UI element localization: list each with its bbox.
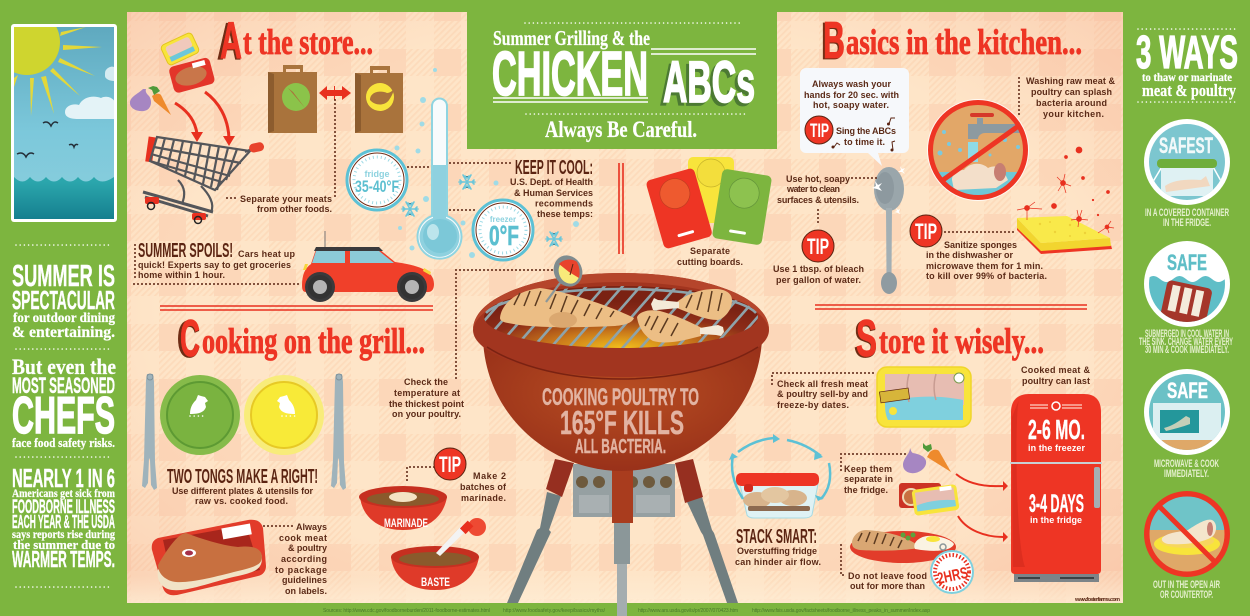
text: cooking poultry to 165: 165°F KILLS bbox=[560, 404, 684, 441]
section: store it wisely bbox=[729, 310, 1120, 603]
title block bbox=[467, 12, 777, 149]
text: always cook meat: to package bbox=[275, 565, 327, 575]
tip: bleach bbox=[773, 210, 864, 285]
sources: Sources: http://www.cdc.gov/foodborneburden/2011-foodborne-estimates.html bbox=[323, 608, 490, 614]
chicken breast bbox=[500, 288, 634, 328]
text: stack smart: Overstuffing fridge bbox=[737, 546, 817, 556]
caption: safe microwave bbox=[1154, 458, 1219, 480]
heading: cooking on the grill bbox=[177, 310, 425, 369]
text: keep it cool bbox=[450, 157, 593, 219]
text: keep it cool: these temps: bbox=[537, 209, 593, 219]
caption: not on countertop bbox=[1153, 579, 1220, 601]
divider: left horizontal bbox=[160, 306, 433, 310]
text: keep it cool: recommends bbox=[535, 198, 593, 208]
chefs text: CHEFS bbox=[12, 387, 115, 445]
heading: at the store bbox=[217, 12, 373, 71]
icon: 2 hour timer: 2HRS bbox=[936, 565, 970, 588]
icon: spoon bbox=[872, 166, 905, 294]
dotted connector bbox=[334, 100, 336, 200]
caption: safe microwave: IMMEDIATELY. bbox=[1164, 468, 1209, 480]
tip: bleach: TIP bbox=[807, 234, 829, 259]
text: summer spoils: SUMMER SPOILS! bbox=[138, 240, 233, 262]
text: two tongs make a right: raw vs. cooked food. bbox=[195, 496, 288, 506]
circle: not on countertop bbox=[1144, 491, 1230, 577]
icon: cutting boards bbox=[645, 157, 772, 249]
statistic text: WARMER TEMPS. bbox=[12, 546, 115, 572]
heading: 3 ways bbox=[1136, 26, 1238, 102]
text: always cook meat: Always bbox=[296, 522, 327, 532]
heading: basics in the kitchen: asics in the kitchen... bbox=[846, 22, 1082, 62]
text: summer spoils: Cars heat up bbox=[238, 249, 296, 259]
text: stack smart: can hinder air flow. bbox=[735, 557, 821, 567]
heading: 3 ways: to thaw or marinate bbox=[1142, 70, 1233, 84]
heading: cooking on the grill: ooking on the grill... bbox=[202, 321, 425, 361]
circle: safe microwave: SAFE bbox=[1167, 378, 1208, 403]
heading: store it wisely: S bbox=[854, 311, 877, 369]
caption: safest bbox=[1145, 207, 1229, 229]
chefs text: MOST SEASONED bbox=[12, 373, 115, 398]
text: stack smart bbox=[735, 526, 821, 567]
sources: http://www.fsis.usda.gov/factsheets/foodborne_illness_peaks_in_summer/index.asp bbox=[752, 608, 930, 614]
gauge: freezer temperature bbox=[450, 200, 533, 260]
heading: store it wisely: tore it wisely... bbox=[879, 321, 1044, 361]
text: separate your meats bbox=[227, 194, 332, 214]
grill legs bbox=[507, 459, 738, 616]
icon: meat trays bbox=[160, 32, 216, 94]
tip: sanitize sponges bbox=[910, 215, 1047, 281]
icon: chicken tray bbox=[877, 367, 971, 427]
speech bubble: hands for 20 sec. with bbox=[804, 90, 899, 100]
chefs text: But even the bbox=[12, 354, 116, 379]
icon: baste bowl and baster: BASTE bbox=[421, 575, 450, 589]
summer is spectacular text: SPECTACULAR bbox=[12, 285, 115, 315]
circle: safe water: SAFE bbox=[1167, 250, 1207, 275]
heading: basics in the kitchen: B bbox=[823, 12, 845, 70]
grill interior with grate bbox=[484, 286, 758, 348]
icon: red fridge bbox=[1010, 394, 1102, 582]
left sidebar: FOODBORNE ILLNESS bbox=[12, 497, 115, 518]
statistic text: says reports rise during bbox=[12, 529, 115, 541]
title block: Summer Grilling & the bbox=[493, 26, 650, 50]
heading: store it wisely bbox=[854, 310, 1044, 369]
icon: red fridge: 3-4 DAYS bbox=[1029, 490, 1084, 518]
tip: sanitize sponges: TIP bbox=[915, 219, 937, 244]
arrows into fridge bbox=[956, 474, 1008, 542]
sources bbox=[323, 608, 930, 614]
text: check fresh meat: & poultry sell-by and bbox=[777, 389, 868, 399]
text: always cook meat: on labels. bbox=[285, 586, 327, 596]
tip: sanitize sponges: to kill over 99% of bacteria. bbox=[926, 271, 1047, 281]
grill bbox=[473, 255, 769, 616]
text: summer spoils: home within 1 hour. bbox=[138, 270, 225, 280]
title block: Always Be Careful. bbox=[545, 117, 697, 142]
badge: tip: TIP bbox=[810, 121, 829, 142]
heading: at the store: A bbox=[220, 12, 242, 70]
tip: marinade: Make 2 bbox=[473, 471, 506, 481]
circle: safest fridge: SAFEST bbox=[1159, 133, 1213, 158]
gauge: fridge temperature: fridge bbox=[364, 169, 390, 179]
circle: safe microwave bbox=[1144, 369, 1230, 455]
text: check the temperature: Check the bbox=[404, 377, 448, 387]
icon: shopping cart bbox=[143, 137, 265, 224]
text: do not leave food: Do not leave food bbox=[848, 571, 927, 581]
tip: marinade: batches of bbox=[460, 482, 507, 492]
caption: safest: IN THE FRIDGE. bbox=[1163, 217, 1211, 229]
text: use hot soapy water: surfaces & utensils. bbox=[777, 195, 859, 205]
icon: left tongs bbox=[142, 374, 157, 490]
text: keep them separate: Keep them bbox=[844, 464, 892, 474]
left sidebar bbox=[11, 24, 117, 588]
tip: bleach: per gallon of water. bbox=[776, 275, 861, 285]
chicken drumstick upper bbox=[651, 289, 732, 320]
icon: yellow plate bbox=[244, 375, 324, 455]
sky picture bbox=[11, 24, 117, 222]
icon: 2 hour timer bbox=[931, 544, 973, 593]
heading: cooking on the grill: C bbox=[180, 310, 200, 368]
gauge: fridge temperature: 35-40°F bbox=[355, 177, 399, 196]
sources: http://www.foodsafety.gov/keep/basics/myths/ bbox=[503, 608, 606, 614]
summer is spectacular text bbox=[12, 258, 115, 341]
summer is spectacular text: for outdoor dining bbox=[13, 311, 115, 326]
text: do not leave food: out for more than bbox=[850, 581, 925, 591]
text: do not leave food bbox=[841, 545, 927, 591]
tip: marinade: TIP bbox=[439, 452, 461, 477]
heading: cooking on the grill: C bbox=[177, 311, 200, 369]
tip: bleach: Use 1 tbsp. of bleach bbox=[773, 264, 864, 274]
tip: marinade bbox=[407, 448, 507, 503]
summer is spectacular text: SUMMER IS bbox=[12, 258, 115, 293]
title block: ABCs bbox=[660, 53, 752, 118]
meat thermometer bbox=[546, 251, 587, 302]
text: separate cutting boards: cutting boards. bbox=[677, 257, 743, 267]
gauge: freezer temperature: 0°F bbox=[489, 220, 519, 251]
heading: store it wisely: S bbox=[856, 310, 877, 368]
text: separate your meats: from other foods. bbox=[257, 204, 332, 214]
plaid tablecloth panel bbox=[127, 12, 1123, 603]
icon: food container with arrows bbox=[729, 434, 830, 518]
icon: onion and carrot bbox=[130, 86, 171, 115]
tip: sanitize sponges: in the dishwasher or bbox=[926, 250, 1013, 260]
heading: basics in the kitchen: B bbox=[821, 13, 844, 71]
sidebar dots bbox=[16, 245, 112, 587]
gauge: fridge temperature bbox=[347, 150, 431, 210]
speech bubble: Sing the ABCs bbox=[836, 126, 896, 136]
icon: baste bowl and baster bbox=[391, 518, 486, 590]
text: cooking poultry to 165: COOKING POULTRY TO bbox=[542, 384, 699, 411]
icon: marinade bowl bbox=[359, 486, 447, 530]
speech bubble: to time it. bbox=[844, 137, 885, 147]
icon: no washing raw meat bbox=[927, 99, 1029, 202]
statistic text bbox=[12, 463, 115, 572]
chicken drumstick lower bbox=[637, 310, 724, 342]
text: cooking poultry to 165: ALL BACTERIA. bbox=[575, 436, 666, 458]
text: keep them separate: separate in bbox=[844, 474, 893, 484]
heading: basics in the kitchen bbox=[821, 12, 1082, 71]
divider: center vertical bbox=[619, 163, 623, 254]
arrows into cart bbox=[175, 92, 235, 146]
text: always cook meat: cook meat bbox=[279, 533, 327, 543]
text: keep it cool: & Human Services bbox=[514, 188, 593, 198]
text: keep them separate bbox=[841, 454, 908, 495]
text: washing raw meat: Washing raw meat & bbox=[1026, 76, 1116, 86]
text: separate your meats: Separate your meats bbox=[240, 194, 332, 204]
text: keep it cool: KEEP IT COOL: bbox=[515, 157, 593, 179]
thermometer with snowflakes bbox=[394, 68, 579, 259]
text: keep it cool: U.S. Dept. of Health bbox=[510, 177, 593, 187]
grill bowl bbox=[483, 340, 762, 471]
tip: sanitize sponges: Sanitize sponges bbox=[944, 240, 1017, 250]
circle: safe water bbox=[1144, 241, 1230, 330]
sources: http://www.ars.usda.gov/is/pr/2007/070423.htm bbox=[638, 608, 738, 614]
icon: right tongs bbox=[331, 374, 346, 490]
icon: sponge with bacteria bbox=[1017, 147, 1114, 254]
text: cooked meat can last bbox=[1021, 365, 1090, 386]
tip: marinade: marinade. bbox=[461, 493, 506, 503]
text: check fresh meat bbox=[772, 373, 877, 410]
icon: red fridge: in the fridge bbox=[1030, 515, 1082, 525]
text: always cook meat: & poultry bbox=[288, 543, 327, 553]
statistic text: NEARLY 1 IN 6 bbox=[12, 463, 115, 493]
grill ash box bbox=[573, 464, 675, 523]
text: summer spoils bbox=[134, 240, 300, 284]
text: cooking poultry to 165 bbox=[542, 384, 699, 458]
text: keep them separate: the fridge. bbox=[844, 485, 888, 495]
icon: red fridge: 2-6 MO. bbox=[1028, 414, 1085, 445]
circle: safest fridge bbox=[1144, 119, 1230, 205]
section: basics in the kitchen bbox=[773, 12, 1116, 294]
caption: safe water bbox=[1139, 328, 1233, 356]
text: always cook meat: according bbox=[281, 554, 327, 564]
icon: grocery bag with carrot bbox=[268, 65, 317, 133]
text: separate cutting boards bbox=[677, 246, 743, 267]
text: check the temperature bbox=[389, 270, 553, 419]
speech bubble: Always wash your bbox=[812, 79, 891, 89]
text: use hot soapy water bbox=[777, 174, 878, 205]
statistic text: Americans get sick from bbox=[12, 488, 115, 500]
icon: plate of food bbox=[850, 530, 956, 563]
icon: onion carrot and trays bbox=[899, 443, 960, 516]
grill rim bbox=[473, 273, 769, 379]
text: use hot soapy water: water to clean bbox=[786, 184, 840, 194]
text: EACH YEAR & THE USDA bbox=[12, 512, 115, 532]
title block: CHICKEN bbox=[492, 40, 648, 109]
chefs text bbox=[12, 354, 116, 450]
summer is spectacular text: & entertaining. bbox=[12, 324, 115, 341]
text: use hot soapy water: Use hot, soapy bbox=[786, 174, 850, 184]
text: check the temperature: temperature at bbox=[394, 388, 460, 398]
icon: red fridge: in the freezer bbox=[1028, 443, 1085, 453]
text: stack smart: STACK SMART: bbox=[736, 526, 817, 548]
icon: marinade bowl: MARINADE bbox=[384, 516, 428, 530]
text: always cook meat bbox=[264, 522, 327, 596]
heading: at the store: A bbox=[217, 13, 241, 71]
right sidebar bbox=[1136, 26, 1238, 601]
section: cutting boards bbox=[645, 157, 772, 267]
text: two tongs make a right: Use different plates & utensils for bbox=[172, 486, 313, 496]
text: washing raw meat: poultry can splash bbox=[1031, 87, 1112, 97]
text: check fresh meat: freeze-by dates. bbox=[777, 400, 849, 410]
text: washing raw meat bbox=[1019, 76, 1116, 119]
text: check the temperature: on your poultry. bbox=[392, 409, 461, 419]
website: www.fosterfarms.com bbox=[1074, 597, 1120, 603]
heading: at the store: t the store... bbox=[243, 22, 373, 62]
section: cooking on the grill bbox=[142, 270, 553, 596]
text: cooked meat can last: poultry can last bbox=[1022, 376, 1090, 386]
icon: green plate bbox=[160, 375, 240, 455]
text: cooked meat can last: Cooked meat & bbox=[1021, 365, 1090, 375]
text: always cook meat: guidelines bbox=[282, 575, 327, 585]
text: two tongs make a right bbox=[167, 466, 318, 506]
section: at the store bbox=[130, 12, 593, 302]
title block: ABCs bbox=[663, 50, 755, 115]
text: check the temperature: the thickest point bbox=[389, 399, 464, 409]
icon: grocery bag with chicken bbox=[355, 66, 403, 133]
icon: double arrow bbox=[319, 86, 351, 100]
speech bubble bbox=[800, 68, 909, 166]
chefs text: face food safety risks. bbox=[12, 435, 115, 450]
tip: sanitize sponges: microwave them for 1 min. bbox=[926, 261, 1043, 271]
divider: right horizontal bbox=[815, 305, 1087, 309]
statistic text: the summer due to bbox=[13, 537, 115, 552]
text: washing raw meat: bacteria around bbox=[1036, 98, 1107, 108]
gauge: freezer temperature: freezer bbox=[490, 215, 516, 224]
icon: steak tray bbox=[152, 520, 266, 595]
icon: red car bbox=[302, 231, 434, 302]
text: washing raw meat: your kitchen. bbox=[1043, 109, 1104, 119]
text: summer spoils: quick! Experts say to get groceries bbox=[138, 260, 291, 270]
text: check fresh meat: Check all fresh meat bbox=[777, 379, 868, 389]
text: separate cutting boards: Separate bbox=[690, 246, 730, 256]
text: two tongs make a right: TWO TONGS MAKE A RIGHT! bbox=[167, 466, 318, 488]
speech bubble: hot, soapy water. bbox=[813, 100, 889, 110]
